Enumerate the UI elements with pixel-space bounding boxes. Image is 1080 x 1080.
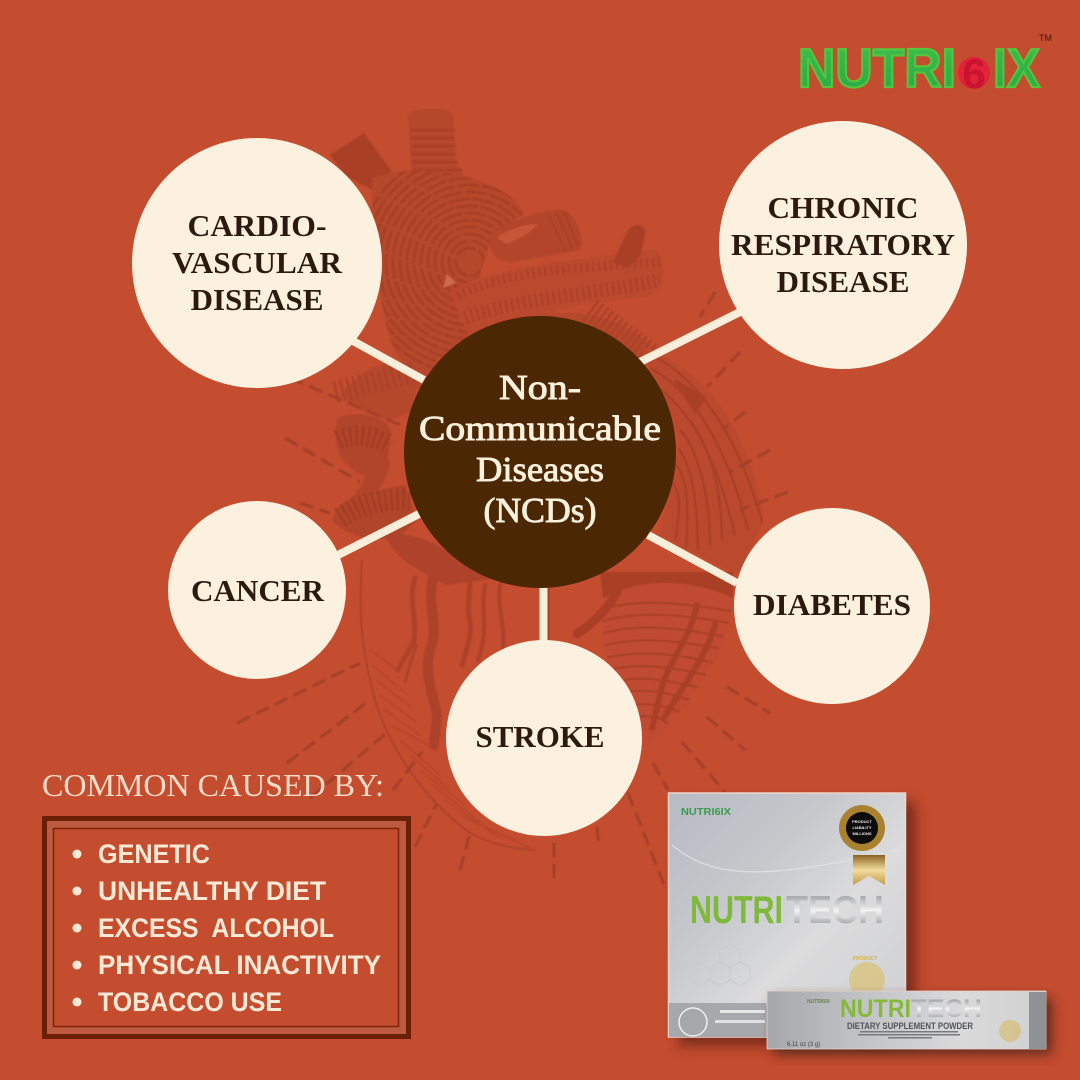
node: cancer — [168, 501, 346, 679]
left coil vessel — [332, 414, 417, 539]
node: stroke: STROKE — [476, 719, 604, 754]
product: Nutritech box: NUTRI6IX — [681, 807, 731, 818]
lower vessel band — [385, 534, 500, 585]
node: chronic respiratory disease — [719, 121, 967, 369]
node: central non-communicable diseases: Communicable — [419, 409, 661, 448]
panel: causes list: GENETIC — [98, 839, 210, 869]
node: diabetes — [734, 508, 930, 704]
node: chronic respiratory disease: CHRONIC — [768, 190, 918, 225]
illustration: anatomical heart — [237, 109, 788, 887]
dashed rays — [237, 292, 788, 887]
product: Nutritech box: MILLIONS — [852, 831, 872, 836]
node: central non-communicable diseases: Non- — [499, 368, 581, 407]
coronary vessels right — [548, 580, 715, 728]
left body outline — [361, 560, 535, 850]
node: central non-communicable diseases — [404, 316, 676, 588]
product: Nutritech sachet: NUTRI — [840, 995, 911, 1023]
vessel ring — [489, 210, 581, 262]
node: cardiovascular disease — [132, 138, 382, 388]
pulmonary artery stub — [330, 133, 392, 190]
logo: Nutri6ix: TM — [1039, 33, 1052, 43]
product: Nutritech sachet: NUTRI6IX — [807, 999, 830, 1005]
product: Nutritech sachet: TECH — [911, 995, 982, 1023]
upper right muscle — [500, 310, 650, 372]
product: Nutritech box: TECH — [786, 889, 884, 932]
logo: Nutri6ix: NUTRI — [798, 37, 956, 99]
node: cardiovascular disease: DISEASE — [190, 282, 324, 317]
product: Nutritech box: LIABILITY — [852, 825, 872, 830]
panel: causes list: TOBACCO USE — [98, 987, 282, 1017]
lower right muscle — [600, 572, 734, 731]
product: Nutritech sachet: DIETARY SUPPLEMENT POWDER — [847, 1021, 973, 1031]
node: stroke — [446, 640, 642, 836]
panel: causes list — [44, 818, 408, 1036]
node: chronic respiratory disease: DISEASE — [776, 264, 910, 299]
right ventricle muscle — [640, 345, 763, 575]
panel: causes list: UNHEALTHY DIET — [98, 876, 326, 906]
panel: causes list: EXCESS ALCOHOL — [98, 913, 334, 943]
logo: Nutri6ix — [798, 33, 1052, 99]
product: Nutritech sachet — [767, 991, 1052, 1054]
node: central non-communicable diseases: (NCDs) — [484, 491, 596, 530]
coronary vessels left — [398, 578, 503, 745]
panel: causes list: PHYSICAL INACTIVITY — [98, 950, 381, 980]
node: chronic respiratory disease: RESPIRATORY — [731, 227, 955, 262]
aorta stem — [408, 109, 470, 182]
pulmonary trunk — [443, 250, 663, 335]
aortic arch — [372, 171, 524, 390]
logo: Nutri6ix: 6 — [962, 50, 986, 97]
lower aortic root — [335, 362, 420, 420]
product: Nutritech sachet: 6.11 oz (3 g) — [787, 1042, 820, 1048]
product: Nutritech box: PRODUCT — [853, 956, 877, 962]
product: Nutritech box: PRODUCT — [852, 819, 872, 824]
node: central non-communicable diseases: Diseases — [476, 450, 604, 489]
connector lines — [338, 311, 742, 642]
node: diabetes: DIABETES — [753, 587, 911, 622]
pulmonary branch — [613, 225, 645, 268]
node: cardiovascular disease: CARDIO- — [188, 208, 326, 243]
logo: Nutri6ix: IX — [993, 37, 1040, 99]
heading: common caused by: COMMON CAUSED BY: — [42, 767, 384, 803]
node: cardiovascular disease: VASCULAR — [172, 245, 343, 280]
node: cancer: CANCER — [191, 573, 325, 608]
product: Nutritech box: NUTRI — [690, 889, 783, 932]
product: Nutritech box — [668, 793, 916, 1046]
